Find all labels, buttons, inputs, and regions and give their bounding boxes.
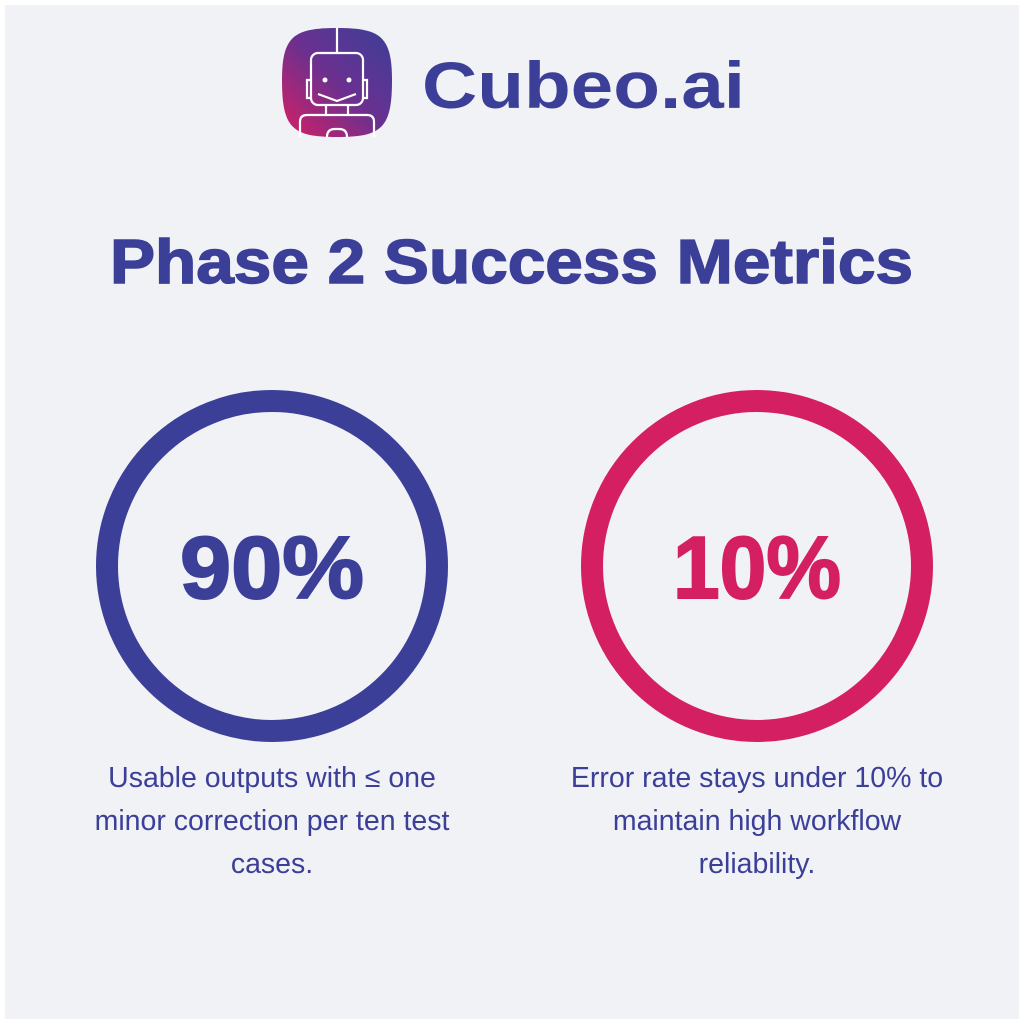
caption: 10%: Error rate stays under 10% to maintain high workflow reliability. — [571, 762, 943, 880]
metric: 10% — [581, 390, 933, 742]
title: Phase 2 Success Metrics — [110, 228, 913, 297]
caption: 90%: Usable outputs with ≤ one minor correction per ten test cases. — [95, 762, 449, 880]
brand name: Cubeo.ai — [422, 48, 745, 122]
icon: robot — [282, 28, 392, 137]
logo — [282, 28, 745, 137]
metric: 10%: 10% — [673, 518, 841, 617]
metric: 90% — [96, 390, 448, 742]
metric: 90%: 90% — [180, 518, 364, 617]
